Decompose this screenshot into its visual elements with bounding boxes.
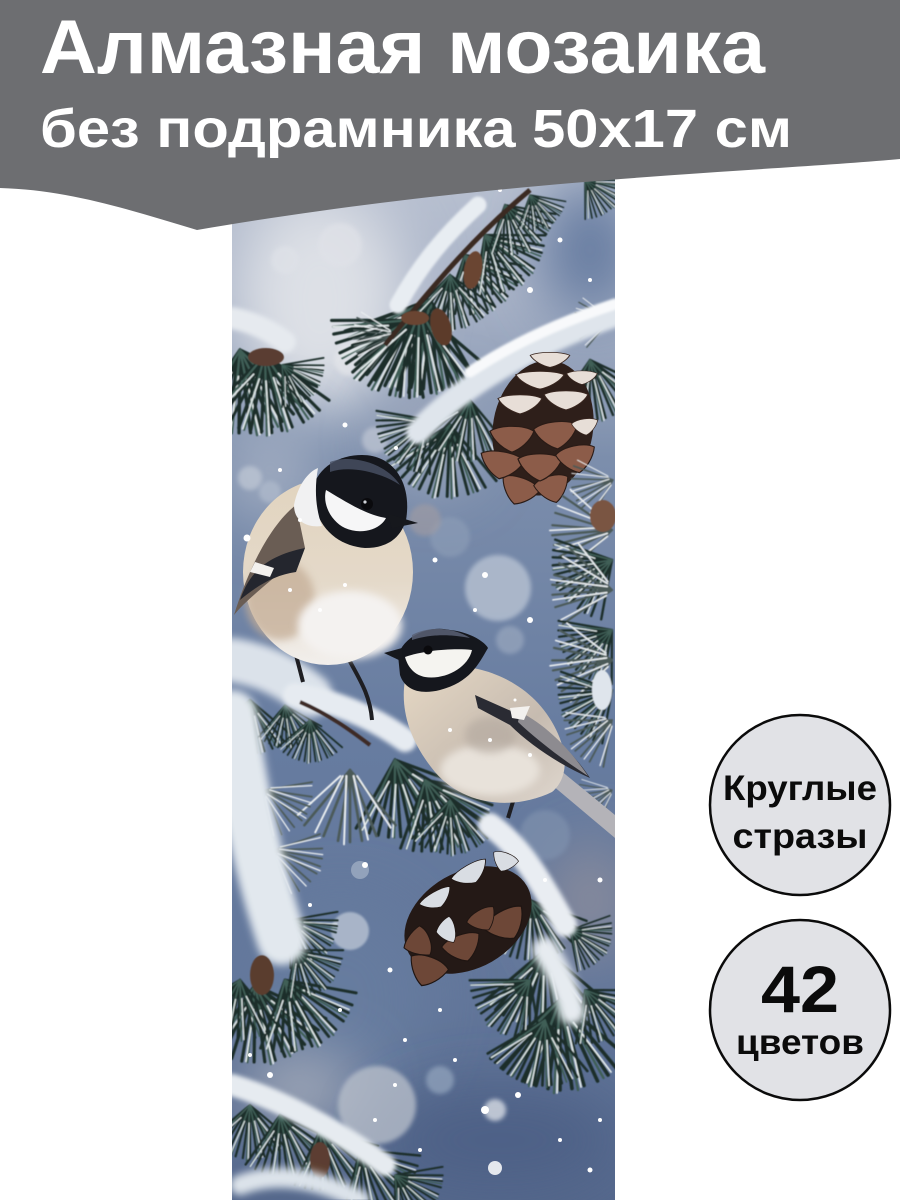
badge: round rhinestones: стразы: [732, 817, 868, 856]
branch: lower left snow bough: [232, 685, 358, 1066]
subtitle: без подрамника 50х17 см: [40, 99, 792, 159]
pine cone: upper: [480, 352, 598, 505]
badge: 42 colours: [710, 920, 890, 1100]
falling snow: [244, 188, 602, 1175]
pine cone: lower: [403, 851, 532, 986]
title: Алмазная мозаика: [40, 5, 766, 90]
head: [312, 455, 407, 548]
branch: top left: [232, 306, 332, 438]
wing: [234, 505, 305, 615]
head: [398, 629, 488, 692]
body: [404, 666, 565, 803]
leg: [508, 795, 515, 818]
badge: round rhinestones: Круглые: [723, 769, 877, 808]
header banner: [0, 0, 900, 230]
body: [243, 479, 413, 665]
bird: upper tit: [234, 455, 418, 720]
branch under the birds: [209, 660, 510, 872]
legs: [296, 655, 372, 720]
badge: 42 colours: цветов: [736, 1023, 864, 1062]
badge: 42 colours: 42: [761, 952, 839, 1026]
wing: [475, 695, 590, 778]
branch: right snow bough: [374, 297, 615, 500]
branch: top centre: [329, 180, 615, 400]
bird: lower tit: [384, 629, 615, 838]
background bokeh: [225, 180, 640, 1190]
photo: two tits on snowy pine branches: [232, 180, 615, 1200]
badge: round rhinestones: [710, 715, 890, 895]
branch: bottom: [209, 1085, 457, 1200]
tail: [556, 773, 615, 838]
branch: right lower pine: [548, 459, 615, 808]
branch: lower right with cone: [468, 810, 615, 1094]
